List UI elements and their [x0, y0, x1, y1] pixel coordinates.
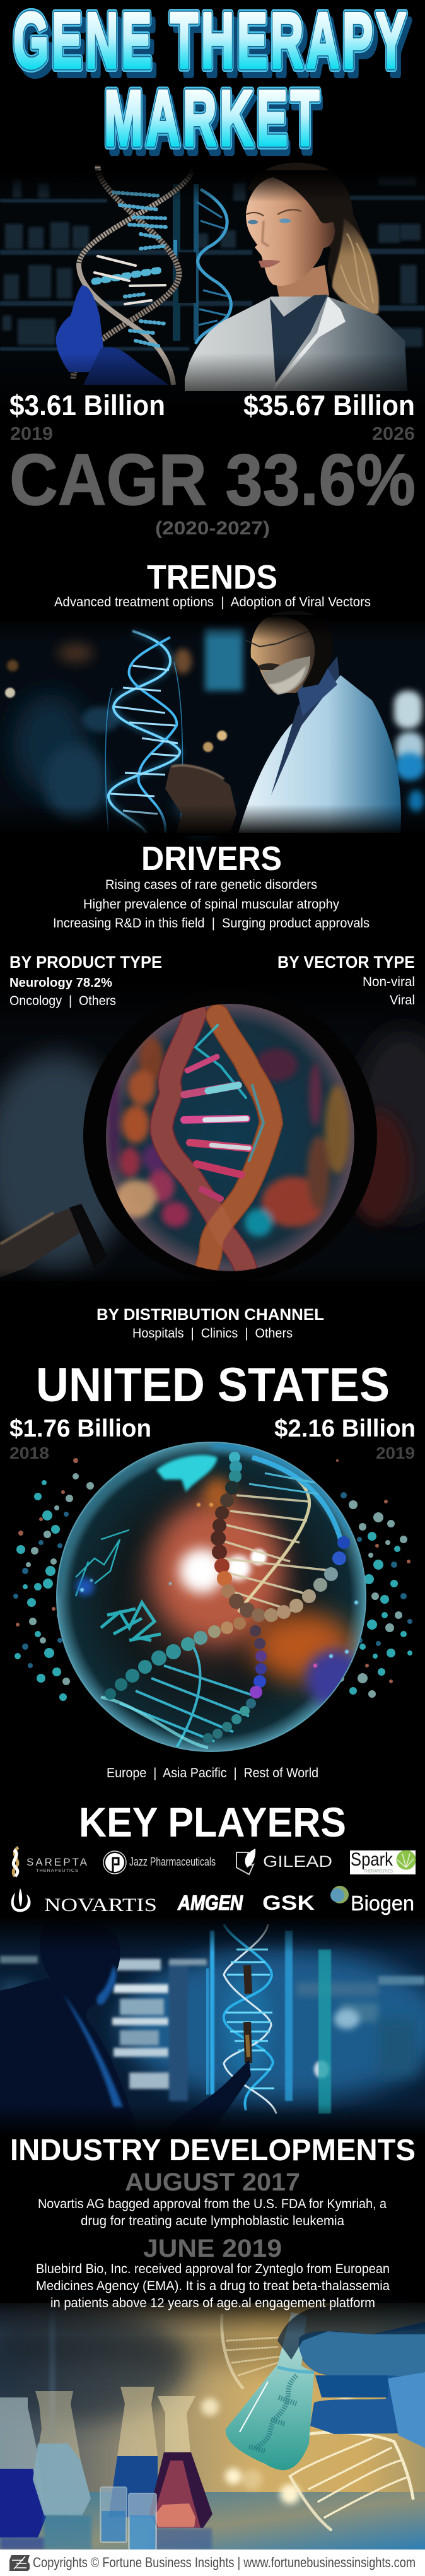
trends image: scientist examining DNA hologram	[0, 611, 425, 836]
woman scientist	[185, 163, 407, 391]
trends heading: TRENDS	[147, 558, 277, 596]
development: June 2019: Bluebird Bio, Inc. received approval for Zynteglo from European	[36, 2262, 390, 2276]
hair	[255, 611, 333, 688]
segment: by product type	[9, 953, 162, 1008]
hero image: scientist with DNA	[0, 163, 425, 413]
drivers list: Higher prevalence of spinal muscular atrophy	[83, 897, 339, 912]
fade at bottom	[0, 1268, 425, 1290]
lens DNA	[161, 1013, 271, 1278]
flask light blue	[33, 2391, 91, 2515]
US value 2018: $1.76 Billion	[9, 1415, 151, 1442]
logo: Gilead	[236, 1849, 332, 1874]
US value 2018: 2018	[9, 1444, 49, 1462]
US value 2018	[9, 1415, 151, 1462]
united states heading: UNITED STATES	[36, 1358, 390, 1412]
silhouetted man	[0, 1918, 251, 2136]
shirt	[270, 295, 328, 383]
trends list: Advanced treatment options | Adoption of Viral Vectors	[54, 595, 371, 609]
gloved hand	[277, 2297, 425, 2448]
flask left blue	[0, 2397, 46, 2538]
warm background	[0, 2303, 425, 2550]
drivers list	[53, 878, 370, 931]
flask blue liquid	[108, 2387, 158, 2517]
key players heading: KEY PLAYERS	[79, 1799, 346, 1845]
segment: by vector type: BY VECTOR TYPE	[277, 953, 415, 972]
fade to black	[0, 170, 425, 202]
segment: by product type: Neurology 78.2%	[9, 975, 112, 990]
man's blue edge light	[63, 1965, 123, 2107]
logo: Spark Therapeutics: Spark	[351, 1849, 393, 1870]
development: August 2017: drug for treating acute lymphoblastic leukemia	[81, 2214, 344, 2228]
title line 2	[104, 75, 324, 169]
US value 2019	[274, 1415, 416, 1462]
US value 2019: 2019	[376, 1444, 415, 1462]
chin highlight	[267, 666, 306, 694]
footer	[0, 2550, 425, 2576]
blue lab background	[0, 1918, 425, 2136]
scattered particles	[13, 1458, 412, 1701]
ponytail	[332, 218, 379, 314]
lab flasks image	[0, 2297, 425, 2550]
title	[13, 0, 414, 169]
background blue DNA model	[175, 184, 231, 344]
face	[246, 177, 335, 286]
held flask	[226, 2312, 314, 2470]
footer logo	[9, 2555, 30, 2571]
segment: by product type: BY PRODUCT TYPE	[9, 953, 162, 972]
gloved hands	[56, 285, 169, 385]
drivers heading: DRIVERS	[141, 840, 282, 878]
neon poles	[206, 1931, 331, 2114]
lapel highlight	[273, 297, 346, 391]
globe DNA upper helix rungs	[218, 1457, 341, 1618]
globe with DNA image	[13, 1442, 412, 1751]
segment: by product type: Oncology | Others	[9, 994, 116, 1008]
hand highlight	[172, 765, 224, 779]
development: August 2017	[38, 2168, 387, 2228]
development: June 2019: in patients above 12 years of age.al engagement platform	[50, 2296, 375, 2310]
magnifying glass image	[0, 1004, 425, 1281]
drivers list: Increasing R&D in this field | Surging product approvals	[53, 916, 370, 931]
development: June 2019	[36, 2235, 390, 2310]
dotted DNA	[222, 2315, 413, 2530]
ponytail strands	[341, 233, 373, 309]
nebula glow	[58, 1445, 363, 1707]
logo: GSK: GSK	[262, 1891, 315, 1914]
segment: by vector type: Non-viral	[363, 975, 415, 989]
market value 2019: 2019	[10, 424, 53, 444]
bokeh background	[0, 621, 425, 833]
face	[251, 616, 315, 693]
drivers list: Rising cases of rare genetic disorders	[105, 878, 317, 892]
CAGR period: (2020-2027)	[155, 518, 270, 539]
top fade	[0, 2297, 425, 2334]
scientist image with glowing DNA	[0, 1915, 425, 2137]
glasses	[246, 631, 309, 647]
other regions: Europe | Asia Pacific | Rest of World	[107, 1766, 318, 1780]
segment: by distribution channel: Hospitals | Clinics | Others	[132, 1326, 293, 1341]
development: August 2017: AUGUST 2017	[125, 2168, 300, 2196]
segment: by distribution channel: BY DISTRIBUTION CHANNEL	[96, 1306, 324, 1324]
logo: Spark Therapeutics	[350, 1849, 416, 1874]
moustache	[257, 663, 280, 670]
cyan continents	[76, 1455, 218, 1640]
dark background glow	[0, 981, 425, 1281]
foreground DNA helix	[73, 165, 192, 385]
logo: Novartis	[11, 1888, 157, 1915]
shirt and tie	[271, 656, 339, 795]
development: June 2019: Medicines Agency (EMA). It is a drug to treat beta-thalassemia	[36, 2279, 390, 2293]
shelves with supplies	[112, 1959, 207, 2101]
US value 2019: $2.16 Billion	[274, 1415, 416, 1442]
market value 2019: $3.61 Billion	[9, 389, 165, 421]
neck	[275, 265, 329, 319]
lab shelves background	[0, 170, 425, 404]
development: June 2019: JUNE 2019	[143, 2235, 282, 2262]
globe DNA upper bead strand	[211, 1452, 350, 1622]
logo: Novartis: NOVARTIS	[44, 1895, 157, 1915]
table reflections	[0, 2515, 212, 2550]
fades	[0, 1915, 425, 1953]
market value 2026	[243, 389, 415, 444]
hands	[165, 765, 236, 833]
development: August 2017: Novartis AG bagged approval from the U.S. FDA for Kymriah, a	[38, 2197, 387, 2211]
logo: Sarepta: THERAPEUTICS	[36, 1867, 78, 1873]
small beakers	[100, 2487, 156, 2550]
logo: Jazz Pharmaceuticals	[103, 1851, 216, 1874]
segment: by vector type	[277, 953, 415, 1008]
logo: Sarepta: SAREPTA	[26, 1856, 88, 1868]
market value 2019	[9, 389, 165, 444]
lens	[106, 1004, 372, 1278]
globe star lights	[80, 1503, 358, 1667]
blurred cell blobs	[108, 1037, 372, 1237]
DNA hologram	[105, 631, 182, 833]
beard	[262, 656, 310, 695]
lens ring	[83, 990, 377, 1281]
logo: Jazz Pharmaceuticals: Jazz Pharmaceuticals	[129, 1856, 216, 1868]
flask purple and pink liquid	[149, 2396, 212, 2528]
logo: Spark Therapeutics: THERAPEUTICS	[364, 1869, 393, 1874]
glowing DNA model	[224, 1924, 276, 2114]
coat	[185, 297, 407, 391]
segment: by vector type: Viral	[390, 993, 415, 1008]
handle	[0, 1204, 107, 1278]
market value 2026: 2026	[372, 424, 415, 444]
eyes and lips	[246, 209, 301, 268]
hair	[248, 163, 372, 299]
fades	[0, 615, 425, 640]
lab coat	[238, 675, 401, 833]
logo: Amgen: AMGEN	[177, 1891, 243, 1914]
segment: by distribution channel	[96, 1306, 324, 1341]
logo: Biogen: Biogen	[351, 1891, 414, 1915]
key player logos	[11, 1847, 416, 1915]
globe DNA lower helix	[101, 1617, 267, 1748]
industry developments heading: INDUSTRY DEVELOPMENTS	[10, 2134, 416, 2167]
male scientist	[165, 611, 401, 833]
globe contents	[58, 1445, 363, 1748]
market value 2026: $35.67 Billion	[243, 389, 415, 421]
glow bokeh	[201, 2394, 353, 2504]
logo: Sarepta	[13, 1847, 88, 1876]
logo: Gilead: GILEAD	[263, 1853, 332, 1871]
logo: Biogen	[330, 1886, 414, 1915]
globe sphere	[57, 1442, 366, 1751]
